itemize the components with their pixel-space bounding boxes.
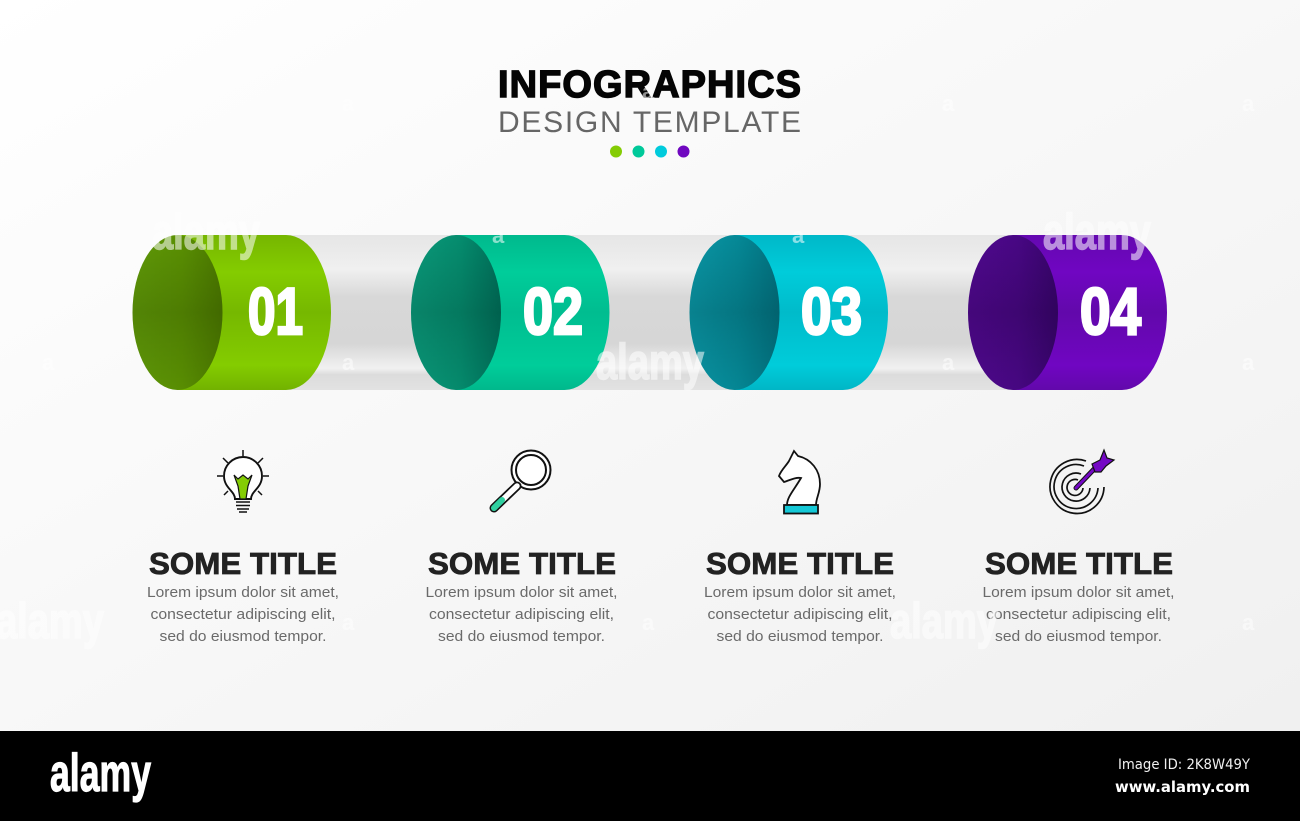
cylinder 02 xyxy=(411,235,610,390)
cylinder 04: 04 xyxy=(1080,274,1141,348)
cylinder 03: 03 xyxy=(801,274,862,348)
icon: target with dart xyxy=(1050,450,1114,513)
watermarks: a xyxy=(342,91,355,116)
watermarks: alamy xyxy=(890,593,998,649)
step 4 text: Lorem ipsum dolor sit amet, xyxy=(982,584,1174,601)
step 1 text: Lorem ipsum dolor sit amet, xyxy=(147,584,339,601)
cylinder 01: 01 xyxy=(248,274,303,348)
step 1 text: consectetur adipiscing elit, xyxy=(150,606,336,623)
step 1 text: sed do eiusmod tempor. xyxy=(160,628,326,645)
watermarks: a xyxy=(42,350,55,375)
watermarks: alamy xyxy=(596,334,704,390)
watermarks: a xyxy=(1242,91,1255,116)
icon: chess knight xyxy=(779,451,820,514)
cylinder 04 xyxy=(968,235,1167,390)
step 3 text: sed do eiusmod tempor. xyxy=(716,628,884,645)
watermarks: a xyxy=(792,223,805,248)
watermarks: a xyxy=(942,91,955,116)
footer logo: alamy xyxy=(50,744,151,803)
cylinder 03 xyxy=(690,235,888,390)
step 3 text xyxy=(704,546,896,645)
step 4 text: consectetur adipiscing elit, xyxy=(986,606,1171,623)
watermarks xyxy=(0,79,1255,649)
watermarks: a xyxy=(342,610,355,635)
step 2 text: Lorem ipsum dolor sit amet, xyxy=(426,584,618,601)
step 3 text: SOME TITLE xyxy=(706,546,894,581)
step 1 text: SOME TITLE xyxy=(149,546,337,581)
image id: Image ID: 2K8W49Y xyxy=(1118,757,1250,773)
watermarks: a xyxy=(642,610,655,635)
watermarks: alamy xyxy=(0,593,104,649)
watermarks: a xyxy=(492,223,505,248)
subheading: design template: DESIGN TEMPLATE xyxy=(498,106,801,139)
cylinder 01 xyxy=(132,235,331,390)
four colored dots xyxy=(610,146,690,158)
watermarks: a xyxy=(342,350,355,375)
step 3 text: consectetur adipiscing elit, xyxy=(708,606,892,623)
step 1 text xyxy=(147,546,339,645)
watermarks: alamy xyxy=(152,204,260,260)
watermarks: a xyxy=(1242,350,1255,375)
website: www.alamy.com xyxy=(1115,778,1250,796)
heading: infographics: INFOGRAPHICS xyxy=(498,64,801,106)
grey connecting tube xyxy=(286,235,1030,390)
step 2 text xyxy=(426,546,618,645)
icon: magnifying glass xyxy=(494,450,550,508)
step 4 text: sed do eiusmod tempor. xyxy=(995,628,1162,645)
watermarks: a xyxy=(1242,610,1255,635)
cylinder 02: 02 xyxy=(523,274,583,348)
step 4 text: SOME TITLE xyxy=(985,546,1173,581)
title xyxy=(498,64,801,139)
step 2 text: sed do eiusmod tempor. xyxy=(438,628,605,645)
watermarks: alamy xyxy=(1043,204,1151,260)
step 4 text xyxy=(982,546,1174,645)
step 3 text: Lorem ipsum dolor sit amet, xyxy=(704,584,896,601)
step 2 text: SOME TITLE xyxy=(428,546,616,581)
footer bar xyxy=(0,731,1300,821)
step 2 text: consectetur adipiscing elit, xyxy=(429,606,614,623)
watermarks: a xyxy=(642,79,655,104)
icon: light bulb xyxy=(217,450,269,512)
watermarks: a xyxy=(942,350,955,375)
